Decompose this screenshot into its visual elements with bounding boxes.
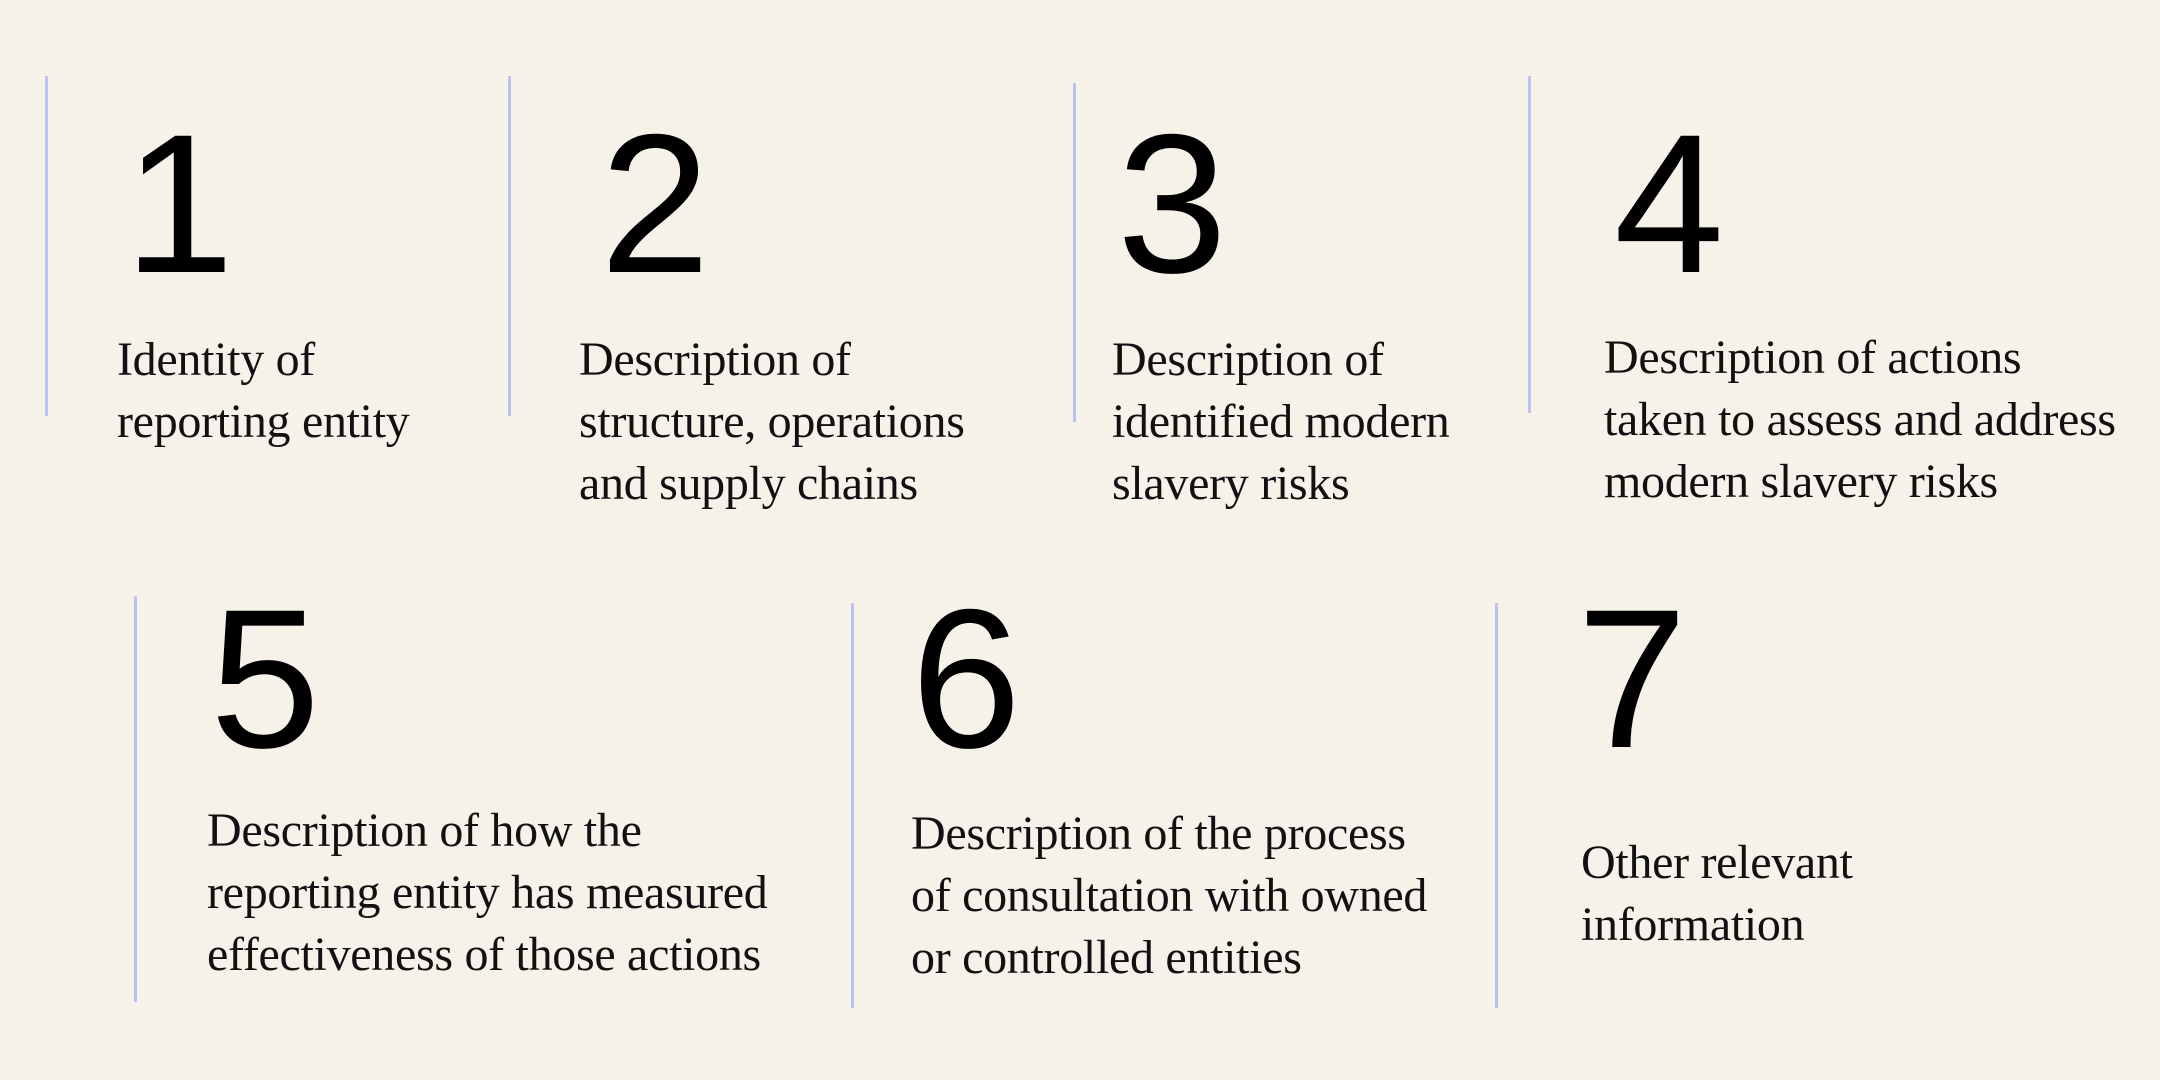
text 7: [1581, 836, 1853, 951]
text 4: Description of actions: [1604, 331, 2021, 384]
text 1: [117, 333, 410, 448]
number 2: 2: [600, 93, 710, 314]
text 3: Description of: [1112, 333, 1384, 386]
item 2: [508, 76, 965, 510]
text 6: [911, 807, 1427, 984]
item 6: [851, 568, 1427, 1008]
text 6: of consultation with owned: [911, 869, 1427, 922]
text 4: modern slavery risks: [1604, 455, 1998, 508]
text 1: Identity of: [117, 333, 315, 386]
text 7: information: [1581, 898, 1804, 951]
text 5: Description of how the: [207, 804, 642, 857]
item 1: [45, 76, 410, 448]
item 3: [1073, 83, 1450, 510]
item 7: [1495, 568, 1853, 1008]
text 1: reporting entity: [117, 395, 409, 448]
text 2: structure, operations: [579, 395, 965, 448]
text 5: reporting entity has measured: [207, 866, 767, 919]
item 5: [134, 568, 768, 1002]
text 3: slavery risks: [1112, 457, 1349, 510]
text 5: effectiveness of those actions: [207, 928, 761, 981]
number 4: 4: [1614, 93, 1724, 314]
text 2: Description of: [579, 333, 851, 386]
text 3: identified modern: [1112, 395, 1449, 448]
item 4: [1528, 76, 2116, 508]
text 4: taken to assess and address: [1604, 393, 2116, 446]
number 1: 1: [124, 93, 234, 314]
text 6: or controlled entities: [911, 931, 1302, 984]
number 3: 3: [1117, 93, 1227, 314]
text 3: [1112, 333, 1450, 510]
number 6: 6: [911, 568, 1021, 789]
text 5: [207, 804, 768, 981]
text 2: and supply chains: [579, 457, 918, 510]
number 5: 5: [210, 568, 320, 789]
text 4: [1604, 331, 2116, 508]
text 6: Description of the process: [911, 807, 1406, 860]
text 7: Other relevant: [1581, 836, 1853, 889]
text 2: [579, 333, 965, 510]
number 7: 7: [1577, 568, 1687, 789]
